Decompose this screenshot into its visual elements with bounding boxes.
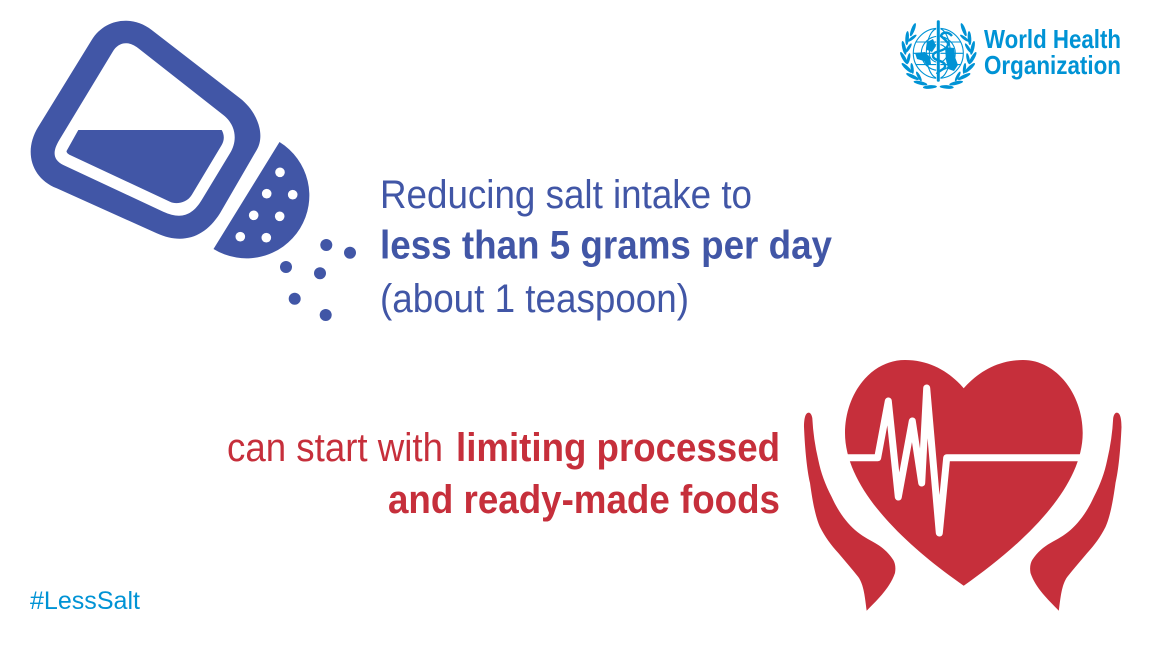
text block: salt reduction message [380, 173, 833, 321]
hashtag: #LessSalt [30, 587, 140, 615]
text block: salt reduction message: less than 5 grams per day [380, 224, 833, 268]
logo wordmark [984, 24, 1121, 80]
falling salt grains [280, 239, 356, 321]
staff and serpent [933, 20, 952, 82]
text block: processed foods message: limiting processed [456, 426, 780, 470]
logo wordmark: World Health [984, 24, 1121, 54]
heart [845, 360, 1083, 586]
logo: World Health Organization [899, 20, 1121, 89]
icon: WHO emblem [899, 20, 978, 89]
text block: processed foods message: can start with [227, 426, 443, 470]
shaker cap with holes [214, 142, 309, 258]
left hand [804, 413, 895, 611]
text block: salt reduction message: Reducing salt intake to [380, 173, 752, 217]
text block: processed foods message: and ready-made foods [388, 478, 780, 522]
text block: processed foods message [227, 426, 780, 522]
text block: salt reduction message: (about 1 teaspoon) [380, 277, 689, 321]
icon: salt shaker [31, 21, 356, 321]
logo wordmark: Organization [984, 50, 1121, 80]
laurel wreath [899, 22, 937, 89]
salt inside shaker [67, 130, 224, 203]
right hand [1030, 413, 1122, 611]
icon: heart in hands [804, 360, 1122, 611]
heartbeat line [844, 388, 1084, 533]
shaker body [31, 21, 260, 239]
